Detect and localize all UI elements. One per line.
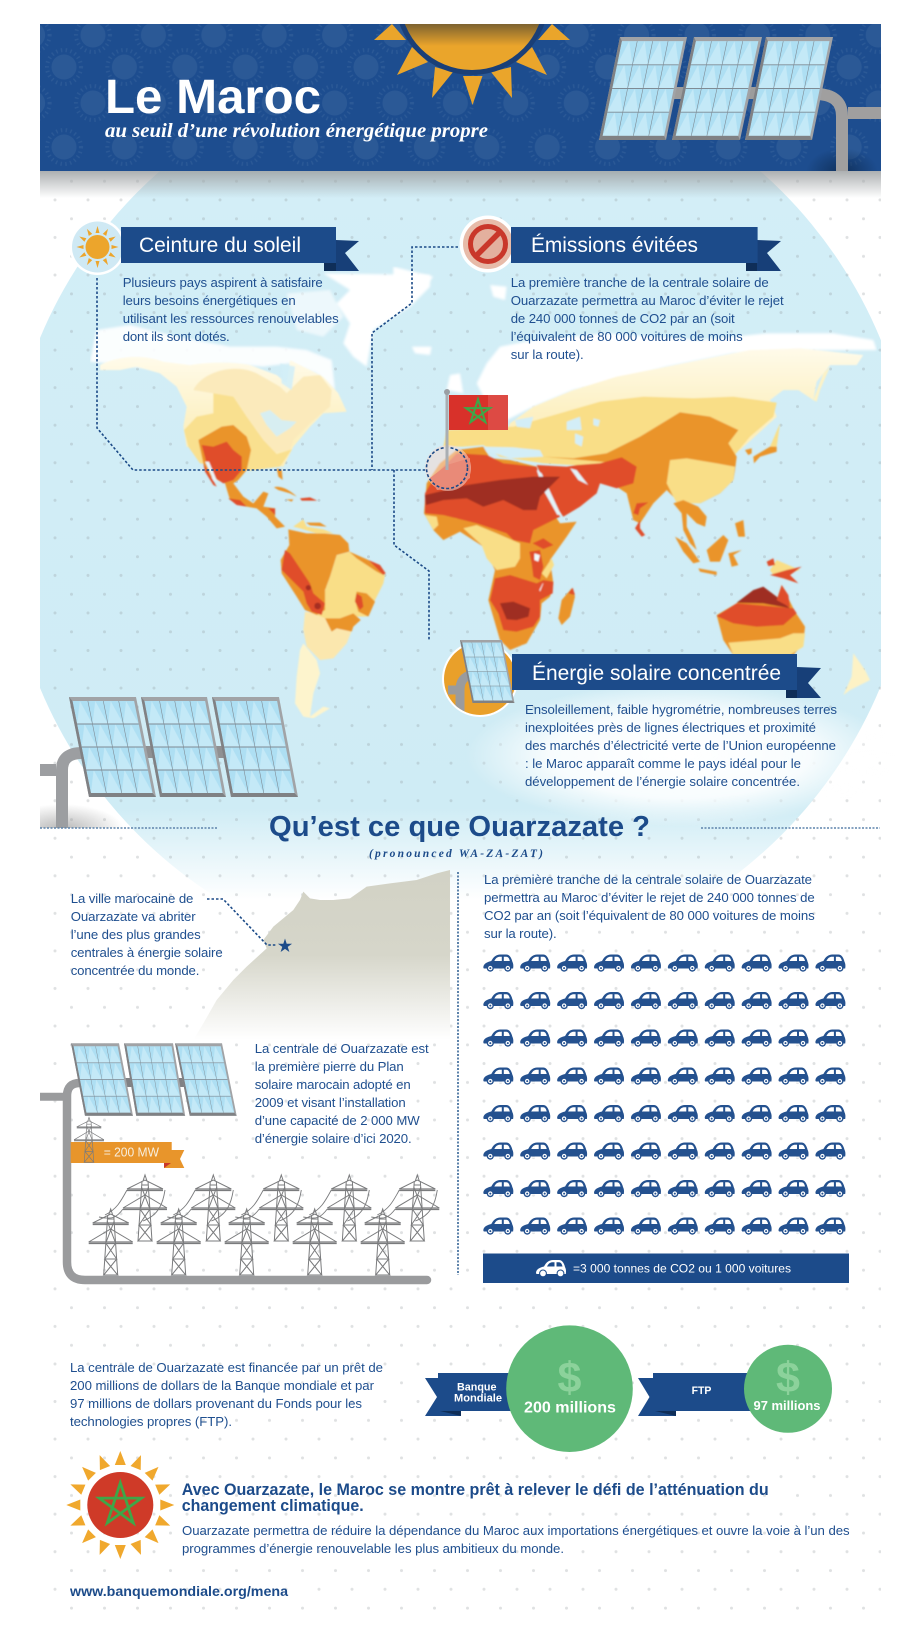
icon: plant solar panels and pipe <box>40 1043 427 1280</box>
icon: large sun <box>374 24 570 105</box>
text: plan solaire: la première pierre du Plan <box>255 1059 404 1074</box>
text block: Plusieurs pays aspirent à satisfaire <box>123 275 323 290</box>
glow behind solar text <box>465 683 895 827</box>
legend ribbon: 200 MW: = 200 MW <box>104 1145 160 1160</box>
text block: : le Maroc apparaît comme le pays idéal pour le <box>525 756 801 771</box>
funding: Banque Mondiale: Mondiale <box>454 1392 502 1404</box>
ribbon heading <box>512 654 821 698</box>
conclusion heading: Avec Ouarzazate, le Maroc se montre prêt à relever le défi de l’atténuation du <box>182 1481 769 1499</box>
text: CO2 avoided <box>484 872 815 941</box>
subtitle: au seuil d’une révolution énergétique propre <box>105 120 488 142</box>
conclusion heading: changement climatique. <box>182 1497 364 1515</box>
car legend bar: =3 000 tonnes de CO2 ou 1 000 voitures <box>573 1262 791 1276</box>
icon: Moroccan sun seal <box>66 1451 174 1559</box>
Africa Eurasia Oceania <box>393 267 877 695</box>
Americas <box>90 273 430 718</box>
icon: prohibition sign <box>460 216 516 272</box>
funding: Banque Mondiale: 200 millions <box>524 1400 616 1417</box>
text: Ouarzazate city <box>71 891 223 978</box>
funding: FTP <box>638 1345 832 1433</box>
icon: map solar panels <box>40 697 298 828</box>
text block: inexploitées près de lignes électriques et proximité <box>525 720 816 735</box>
text block: La première tranche de la centrale solaire de <box>511 275 769 290</box>
funding: Banque Mondiale: $ <box>558 1354 582 1402</box>
text: CO2 avoided: permettra au Maroc d’éviter le rejet de 240 000 tonnes de <box>484 890 815 905</box>
car legend bar <box>483 1254 849 1283</box>
pictogram chart: cars <box>483 954 845 1235</box>
conclusion text <box>182 1523 850 1556</box>
text: financing: 200 millions de dollars de la Banque mondiale et par <box>70 1378 375 1393</box>
title: Le Maroc <box>105 71 321 124</box>
icon: solar panels with pipe <box>599 37 881 171</box>
text: plan solaire: d’une capacité de 2 000 MW <box>255 1113 420 1128</box>
ribbon heading: Énergie solaire concentrée <box>532 660 781 685</box>
text block: de 240 000 tonnes de CO2 par an (soit <box>511 311 735 326</box>
text block: utilisant les ressources renouvelables <box>123 311 339 326</box>
text block: des marchés d’électricité verte de l’Union européenne <box>525 738 836 753</box>
text: CO2 avoided: La première tranche de la centrale solaire de Ouarzazate <box>484 872 812 887</box>
legend ribbon: 200 MW <box>71 1117 184 1168</box>
connector lines <box>97 247 458 640</box>
section rules <box>40 828 880 1275</box>
conclusion text: programmes d’énergie renouvelable les plus ambitieux du monde. <box>182 1541 564 1556</box>
pronunciation note: (pronounced WA-ZA-ZAT) <box>369 848 543 860</box>
conclusion text: Ouarzazate permettra de réduire la dépendance du Maroc aux importations énergétiques et ouvre la voie à l’un des <box>182 1523 850 1538</box>
text block: sur la route). <box>511 347 584 362</box>
text: Ouarzazate city: concentrée du monde. <box>71 963 199 978</box>
text: Ouarzazate city: centrales à énergie solaire <box>71 945 223 960</box>
text block <box>123 275 339 344</box>
text block: leurs besoins énergétiques en <box>123 293 296 308</box>
banner shadow <box>40 171 881 198</box>
pylons <box>89 1175 439 1275</box>
text block: l’équivalent de 80 000 voitures de moins <box>511 329 743 344</box>
conclusion heading <box>182 1481 769 1515</box>
icon: solar panel in circle <box>442 640 518 717</box>
panel: Énergie solaire concentrée <box>442 640 837 789</box>
world map with solar belt zones <box>90 267 877 718</box>
text block <box>511 275 784 362</box>
text: financing: 97 millions de dollars provenant du Fonds pour les <box>70 1396 362 1411</box>
funding: FTP: FTP <box>692 1385 711 1397</box>
text: CO2 avoided: sur la route). <box>484 926 557 941</box>
funding: FTP: 97 millions <box>754 1398 820 1413</box>
ribbon heading <box>121 227 359 271</box>
text block <box>525 702 837 789</box>
text block: dont ils sont dotés. <box>123 329 230 344</box>
text: plan solaire: d’énergie solaire d’ici 2020. <box>255 1131 412 1146</box>
panel: Émissions évitées <box>460 216 784 362</box>
text: Ouarzazate city: l’une des plus grandes <box>71 927 201 942</box>
text block: Ouarzazate permettra au Maroc d’éviter le rejet <box>511 293 784 308</box>
text block: Ensoleillement, faible hygrométrie, nombreuses terres <box>525 702 837 717</box>
text: plan solaire: La centrale de Ouarzazate est <box>255 1041 429 1056</box>
Morocco highlight and flag <box>425 389 508 491</box>
panel: Ceinture du soleil <box>70 219 359 344</box>
text: Ouarzazate city: La ville marocaine de <box>71 891 193 906</box>
text: plan solaire: 2009 et visant l’installation <box>255 1095 406 1110</box>
funding: FTP: $ <box>776 1354 800 1402</box>
text: financing: La centrale de Ouarzazate est financée par un prêt de <box>70 1360 383 1375</box>
text: plan solaire: solaire marocain adopté en <box>255 1077 411 1092</box>
ribbon heading <box>511 227 781 271</box>
ribbon heading: Ceinture du soleil <box>139 233 301 257</box>
icon: sun <box>70 219 126 275</box>
header banner <box>40 24 881 171</box>
funding: Banque Mondiale: Banque <box>457 1382 496 1394</box>
text block: développement de l’énergie solaire concentrée. <box>525 774 800 789</box>
map of Morocco <box>193 870 450 1040</box>
footer url: www.banquemondiale.org/mena <box>69 1584 289 1599</box>
funding: Banque Mondiale <box>425 1325 633 1452</box>
ribbon heading: Émissions évitées <box>531 232 698 257</box>
text: plan solaire <box>255 1041 429 1146</box>
text: CO2 avoided: CO2 par an (soit l’équivalent de 80 000 voitures de moins <box>484 908 815 923</box>
section heading: Qu’est ce que Ouarzazate ? <box>269 811 650 843</box>
text: financing <box>70 1360 383 1429</box>
text: Ouarzazate city: Ouarzazate va abriter <box>71 909 196 924</box>
text: financing: technologies propres (FTP). <box>70 1414 232 1429</box>
